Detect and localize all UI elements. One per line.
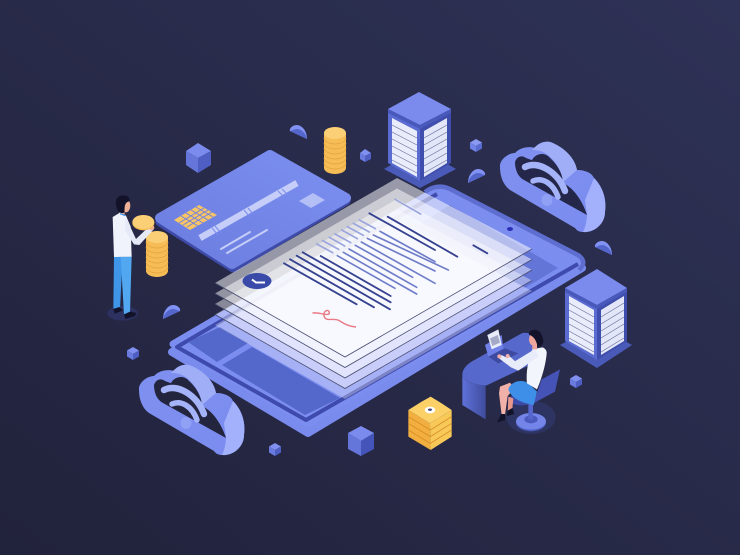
screen panel large [222,347,340,415]
icon: half dome near top coins [290,125,307,139]
document text lines [284,199,487,309]
panel: document stack [215,178,532,399]
screen panel right [415,205,558,288]
phone top face [173,189,581,424]
screen panel small [188,327,248,362]
icon: upper cloud wifi [500,142,605,232]
icon: half dome right of phone [595,241,612,255]
sheet 3 [215,199,532,378]
icon: small cube left of phone [127,347,139,360]
icon: half dome near top cloud [468,169,485,183]
icon: small cube by upper server [360,149,371,162]
chair [508,369,560,431]
icon: half dome near man [163,305,180,319]
server: lower rack [560,269,632,368]
card face [160,155,346,264]
lower coin stack by man [146,231,168,277]
server: upper rack [384,92,456,188]
panel: smartphone [172,187,583,433]
sheet edges [215,249,532,388]
camera dot [507,227,513,231]
icon: upper coin stack [324,127,346,174]
bezel top right edge [425,187,583,270]
sheet 5 [215,220,532,399]
card small panel [299,193,325,208]
sheet 4 [215,210,532,388]
icon: cube below phone [348,426,374,456]
icon: small cube near chair [570,375,582,388]
laptop [485,329,518,363]
figure: man holding coin [107,195,154,321]
head and hair [529,330,543,349]
card text lines [221,230,267,253]
legs and shoes [497,383,514,423]
icon: yellow document stack [408,397,452,450]
icon: cube left of card [186,143,211,173]
signature [312,310,356,327]
bezel lower and left edges [177,194,578,420]
sheet 2 [215,188,532,368]
figure: woman at desk [462,329,560,434]
icon: small cube under phone [269,443,281,456]
card chip [174,205,217,230]
card magnetic stripe [200,183,297,238]
skirt [508,381,537,405]
icon: small cube right of upper server [470,139,482,152]
icon: lower cloud wifi [139,365,244,455]
blouse [497,347,547,389]
desk [462,333,533,419]
sheet 1 [215,178,532,357]
panel: credit card [160,155,346,268]
phone side [172,190,582,433]
card edge [160,159,346,268]
check badge [242,273,272,289]
